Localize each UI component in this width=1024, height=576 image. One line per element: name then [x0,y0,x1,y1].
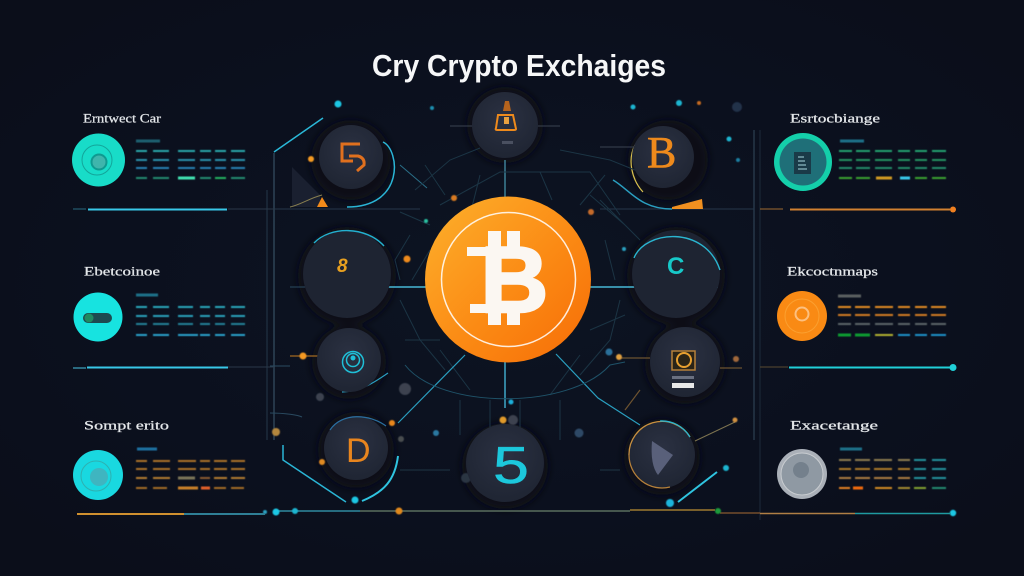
scattered network dots [263,100,956,516]
node: lower right [650,327,720,397]
data table [839,449,946,488]
node: bottom right [629,421,695,488]
progress line [77,513,265,515]
node: lower left [317,328,381,392]
node: middle right [632,230,720,318]
central bitcoin coin [425,196,591,362]
heading: Exacetange [790,418,879,432]
network connections [267,118,760,520]
bitcoin symbol: B [480,227,548,332]
icon: cyan wallet [74,292,122,342]
orange wedges [317,197,703,209]
progress line [760,512,951,514]
heading: Ebetcoinoe [84,264,161,278]
heading: Esrtocbiange [790,112,881,126]
node: bottom center: 5 [493,437,529,495]
title: Cry Crypto Exchaiges [372,48,666,83]
data table [839,141,946,178]
node: bottom left [324,416,388,480]
data table [136,141,245,178]
icon: teal document coin [774,133,832,191]
panel: bottom right exchange [760,418,951,514]
faint triangle backdrop [292,167,320,207]
panel: top right exchange [760,112,956,212]
node: bottom center [466,424,544,502]
node: top [472,92,538,158]
bottom timeline line [275,510,760,513]
data table [136,295,245,335]
heading: Sompt erito [84,418,169,432]
data table [838,296,946,335]
node: upper right: B [647,128,676,177]
progress line [760,364,956,371]
icon: silver coin [777,449,827,499]
panel: middle left exchange [73,264,275,368]
icon: cyan coin [73,450,123,500]
progress line [760,206,956,212]
faint mesh around centre [395,148,640,440]
icon: orange coin [777,291,827,341]
panel: top left exchange [72,112,275,210]
icon: teal coin [72,134,125,186]
node: middle left: 8 [337,256,348,277]
progress line [73,367,275,368]
node: bottom left: D [346,432,371,470]
node: upper right [632,126,694,188]
panel: bottom left exchange [73,418,265,514]
node: middle right: C [667,253,684,280]
node: upper left [319,125,383,189]
data table [136,449,245,488]
heading: Ekcoctnmaps [787,264,878,278]
node: middle left [303,230,391,318]
heading: Erntwect Car [83,112,162,126]
progress line [73,208,275,210]
panel: middle right exchange [760,264,956,371]
dark halos behind nodes [298,87,725,509]
